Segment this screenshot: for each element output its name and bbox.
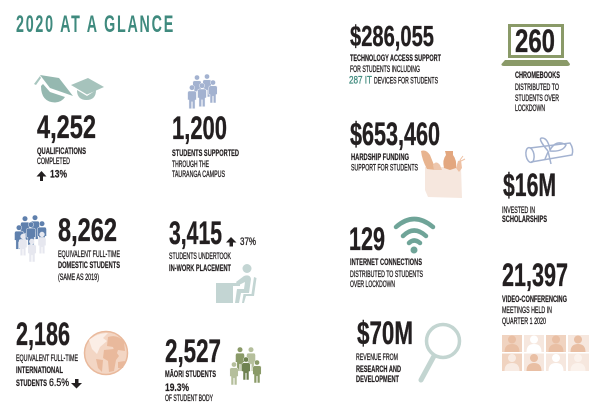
Tauranga campus stat: STUDENTS SUPPORTED (172, 148, 239, 158)
icon: people group green (230, 347, 261, 385)
hardship funding stat: $653,460 (350, 116, 440, 152)
technology access stat: TECHNOLOGY ACCESS SUPPORT (350, 53, 441, 63)
in-work placement stat: 3,415 (169, 215, 222, 251)
Tauranga campus stat (172, 110, 239, 179)
international students stat (16, 316, 82, 389)
domestic students stat: DOMESTIC STUDENTS (58, 260, 120, 270)
internet connections stat: INTERNET CONNECTIONS (350, 257, 422, 267)
qualifications stat: COMPLETED (37, 156, 70, 166)
icon: domestic students group (14, 215, 46, 262)
icon: magnifying glass (421, 324, 460, 380)
hardship funding stat: HARDSHIP FUNDING (351, 152, 409, 162)
chromebooks text: LOCKDOWN (515, 103, 545, 113)
international students stat: STUDENTS (16, 378, 47, 388)
Māori students stat: 19.3% (165, 382, 189, 394)
Tauranga campus stat: TAURANGA CAMPUS (172, 169, 225, 179)
hardship funding stat: SUPPORT FOR STUDENTS (351, 162, 418, 172)
Māori students stat: MĀORI STUDENTS (165, 369, 216, 379)
chromebooks text: DISTRIBUTED TO (515, 82, 559, 92)
icon: wifi (396, 219, 433, 254)
Māori students stat (165, 333, 221, 403)
icon: up arrow (226, 237, 236, 246)
icon: people group blue-grey (188, 74, 217, 109)
in-work placement stat: IN-WORK PLACEMENT (169, 263, 231, 273)
video-conferencing stat: 21,397 (502, 257, 568, 293)
icon: scroll with ribbon (525, 138, 573, 164)
hardship funding stat (350, 116, 440, 172)
technology access stat: DEVICES FOR STUDENTS (374, 76, 438, 86)
technology access stat: 287 IT (349, 74, 372, 86)
Māori students stat: 2,527 (165, 333, 221, 369)
icon: graduation caps (34, 75, 104, 102)
icon: person at desk (216, 264, 256, 303)
video-conferencing stat: MEETINGS HELD IN (502, 305, 552, 315)
qualifications stat: 4,252 (37, 109, 96, 145)
domestic students stat: 8,262 (58, 212, 117, 248)
chromebooks text (515, 70, 560, 113)
scholarships stat: INVESTED IN (502, 205, 535, 215)
icon: laptop with 260: 260 (515, 23, 555, 59)
scholarships stat (502, 167, 556, 224)
revenue stat (356, 315, 413, 384)
international students stat: INTERNATIONAL (16, 365, 63, 375)
scholarships stat: SCHOLARSHIPS (502, 214, 547, 224)
international students stat: EQUIVALENT FULL-TIME (16, 353, 78, 363)
qualifications stat: 13% (50, 168, 67, 180)
chromebooks text: STUDENTS OVER (515, 93, 559, 103)
technology access stat: $286,055 (350, 21, 434, 53)
Tauranga campus stat: THROUGH THE (172, 159, 209, 169)
international students stat: 2,186 (16, 316, 70, 352)
in-work placement stat: 37% (240, 236, 256, 248)
revenue stat: REVENUE FROM (356, 352, 398, 362)
icon: laptop with 260 (501, 23, 570, 66)
domestic students stat (58, 212, 120, 282)
Māori students stat: OF STUDENT BODY (165, 393, 213, 403)
internet connections stat: DISTRIBUTED TO STUDENTS (350, 269, 423, 279)
video-conferencing stat (502, 257, 568, 326)
scholarships stat: $16M (503, 167, 556, 203)
qualifications stat (36, 109, 96, 181)
internet connections stat: 129 (349, 221, 385, 257)
technology access stat: FOR STUDENTS INCLUDING (350, 64, 420, 74)
domestic students stat: (SAME AS 2019) (58, 272, 99, 282)
domestic students stat: EQUIVALENT FULL-TIME (58, 249, 120, 259)
title: 2020 AT A GLANCE (16, 11, 175, 38)
icon: globe (84, 332, 128, 374)
video-conferencing stat: QUARTER 1 2020 (502, 316, 546, 326)
icon: video call grid (502, 335, 589, 371)
international students stat: 6.5% (49, 377, 69, 389)
icon: down arrow (71, 379, 82, 388)
chromebooks text: CHROMEBOOKS (515, 70, 560, 80)
revenue stat: DEVELOPMENT (356, 374, 399, 384)
technology access stat (349, 21, 441, 86)
in-work placement stat: STUDENTS UNDERTOOK (169, 251, 231, 261)
internet connections stat: OVER LOCKDOWN (350, 279, 395, 289)
in-work placement stat (169, 215, 256, 273)
icon: up arrow (36, 171, 46, 181)
revenue stat: $70M (357, 315, 413, 351)
icon: grocery bag (421, 150, 465, 198)
Tauranga campus stat: 1,200 (172, 110, 227, 146)
revenue stat: RESEARCH AND (356, 364, 401, 374)
qualifications stat: QUALIFICATIONS (37, 146, 86, 156)
internet connections stat (349, 221, 423, 289)
